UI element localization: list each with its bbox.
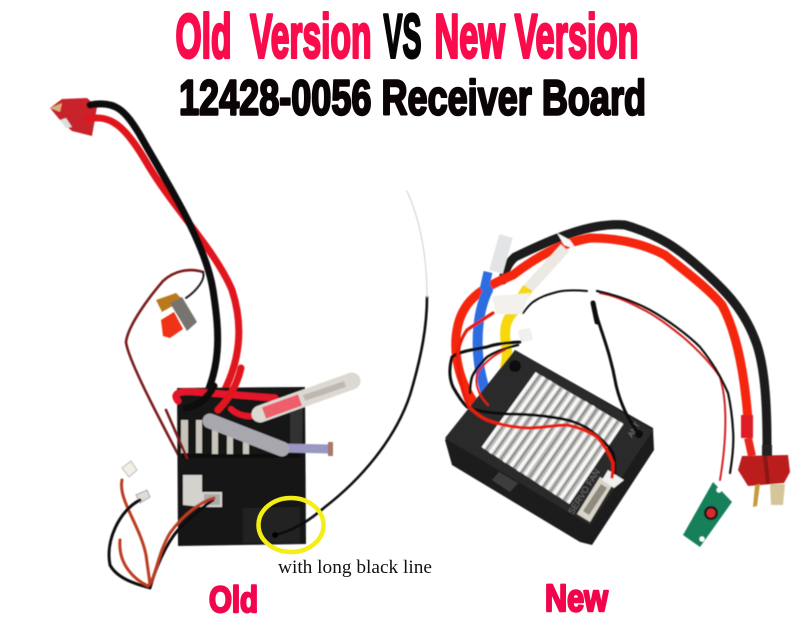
bullet terminals and sleeves [484,233,577,343]
board label: servo fan: SERVO FAN [566,467,602,516]
callout circle: long black line [258,498,324,552]
antenna wire: new [593,303,639,434]
deans t-plug [738,415,790,507]
title: old version vs new version: New Version [434,2,638,72]
title: old version vs new version: Old Version [176,2,372,72]
black and red wire ends on board [186,386,214,408]
white port connector [183,475,222,507]
photo: old receiver board with wiring [50,98,427,588]
thin switch lead [523,290,733,480]
switch pcb [683,482,732,547]
slide switch [156,293,197,338]
bullet connector: blue [210,421,333,456]
thin lead bundle over heat sink [450,313,615,477]
yellow motor wire [498,310,515,394]
receiver board body: old [177,387,306,546]
servo connector [577,470,624,522]
antenna wire [275,191,427,535]
bullet connector: red [260,381,352,414]
receiver board body: new [445,350,654,545]
thick black and red power wires [456,225,767,445]
switch lead loop [126,270,203,460]
label: new: New [545,578,608,620]
red loop wire on board [176,392,275,416]
title: old version vs new version: VS [384,2,422,72]
power leads: black and red [88,104,239,412]
heat sink pins [181,420,249,454]
board label: ant: ANT [626,421,642,439]
photo: new receiver board with wiring [445,225,790,547]
callout text: with long black line [278,557,432,578]
label: old: Old [209,579,258,620]
heat sink fins [483,373,622,503]
battery connector: old board [50,98,97,136]
blue motor wire [478,290,490,408]
subtitle: part number: 12428-0056 Receiver Board [179,72,646,126]
signal wires and white plugs [109,461,214,588]
